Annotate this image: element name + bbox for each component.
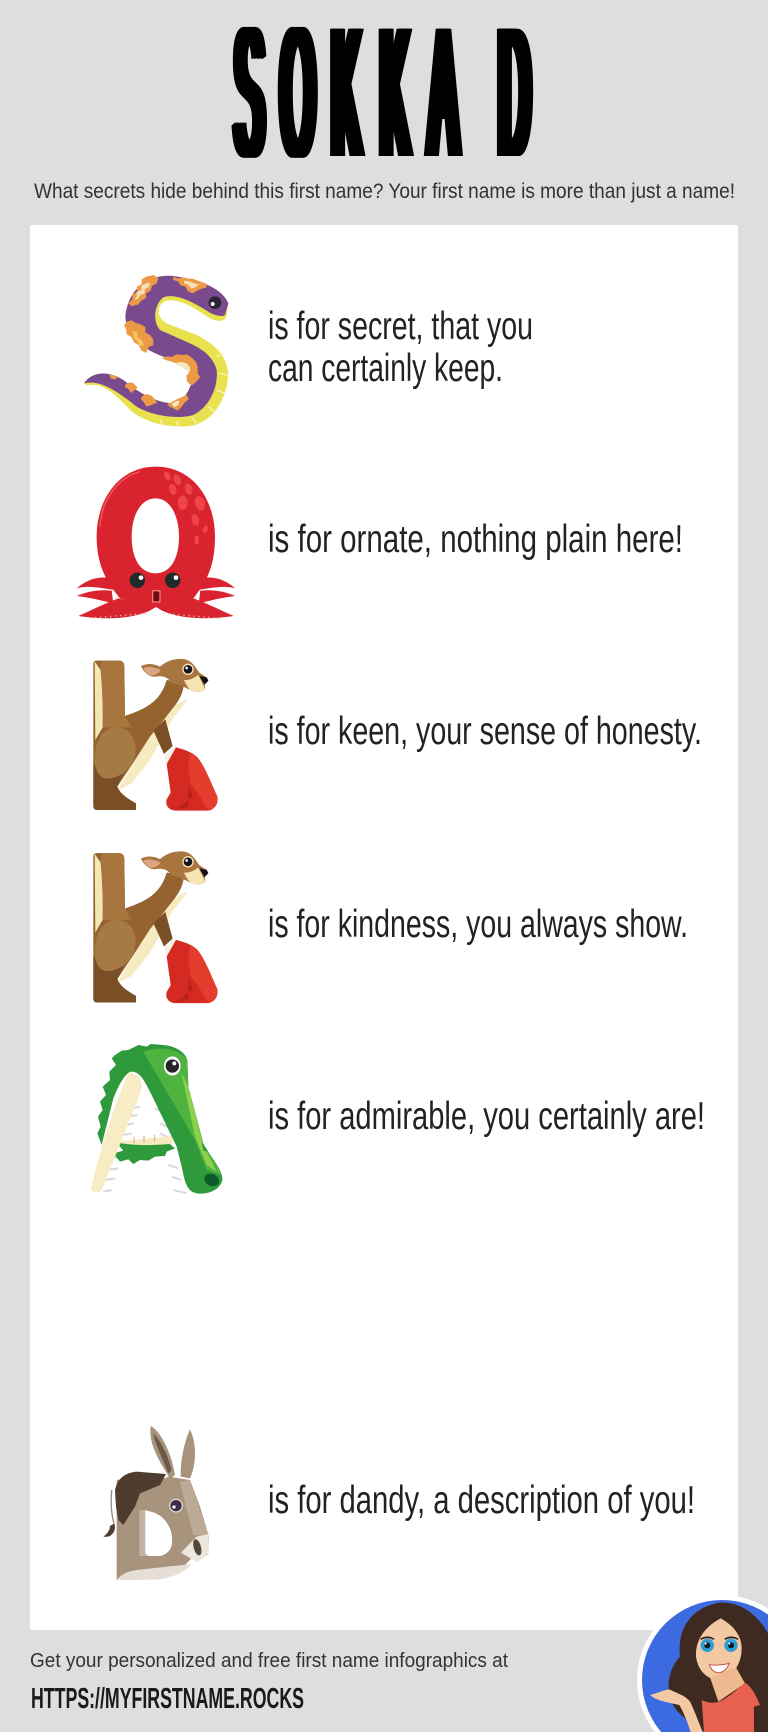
text: S line: can certainly keep.	[268, 347, 503, 390]
row: letter A	[91, 1044, 705, 1194]
row: second letter K	[93, 851, 688, 1003]
avatar: woman in circle	[637, 1595, 768, 1732]
icon: crocodile A	[91, 1044, 222, 1194]
icon: kangaroo K	[93, 659, 218, 811]
row: letter K	[93, 659, 702, 811]
text: S line: is for secret, that you	[268, 305, 533, 348]
title	[232, 0, 534, 196]
icon: kangaroo K repeat	[93, 851, 218, 1003]
icon: octopus O	[77, 467, 235, 619]
icon: donkey D	[103, 1426, 209, 1580]
footer: call to action: Get your personalized and free first name infographics at	[30, 1650, 508, 1672]
row: letter S	[84, 275, 533, 427]
row: letter O	[77, 467, 683, 619]
footer: url: HTTPS://MYFIRSTNAME.ROCKS	[31, 1683, 304, 1715]
icon: snake S	[84, 275, 228, 427]
text: S line	[268, 305, 533, 390]
panel: letters	[30, 225, 738, 1630]
row: letter D	[103, 1426, 695, 1580]
